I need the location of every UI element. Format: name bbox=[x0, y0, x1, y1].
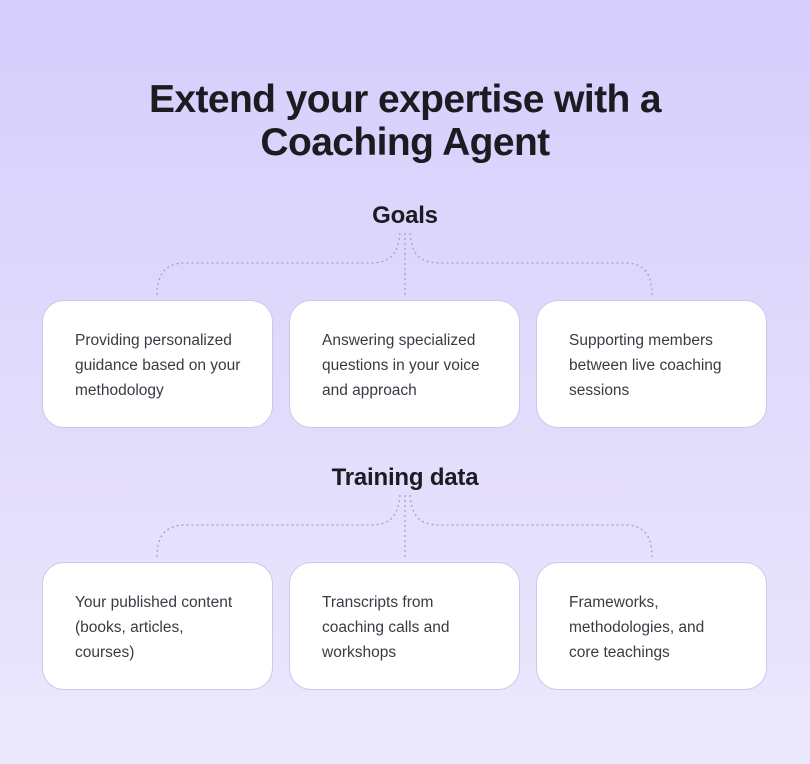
title bbox=[149, 78, 662, 164]
card: goal 2 bbox=[289, 300, 520, 428]
card: goal 3 bbox=[536, 300, 767, 428]
card: goal 2: Answering specialized bbox=[322, 332, 475, 349]
title: Coaching Agent bbox=[260, 121, 550, 164]
card: data 3: Frameworks, bbox=[569, 594, 659, 611]
card: data 1: courses) bbox=[75, 644, 134, 661]
card: goal 2: questions in your voice bbox=[322, 357, 480, 374]
card: data 1: Your published content bbox=[75, 594, 232, 611]
card: goal 2: and approach bbox=[322, 382, 417, 399]
card: goal 1: methodology bbox=[75, 382, 164, 399]
card: goal 1: guidance based on your bbox=[75, 357, 240, 374]
card: data 2 bbox=[289, 562, 520, 690]
card: goal 1: Providing personalized bbox=[75, 332, 232, 349]
card: goal 3: Supporting members bbox=[569, 332, 713, 349]
card: goal 3: sessions bbox=[569, 382, 629, 399]
title: Extend your expertise with a bbox=[149, 78, 661, 121]
card: data 3: methodologies, and bbox=[569, 619, 704, 636]
heading: goals: Goals bbox=[372, 202, 438, 229]
card: data 1: (books, articles, bbox=[75, 619, 184, 636]
card: data 3 bbox=[536, 562, 767, 690]
card: data 2: workshops bbox=[322, 644, 396, 661]
card: data 2: coaching calls and bbox=[322, 619, 450, 636]
card: data 2: Transcripts from bbox=[322, 594, 433, 611]
card: data 3: core teachings bbox=[569, 644, 670, 661]
heading: training data: Training data bbox=[332, 464, 478, 491]
card: goal 1 bbox=[42, 300, 273, 428]
card: goal 3: between live coaching bbox=[569, 357, 722, 374]
card: data 1 bbox=[42, 562, 273, 690]
